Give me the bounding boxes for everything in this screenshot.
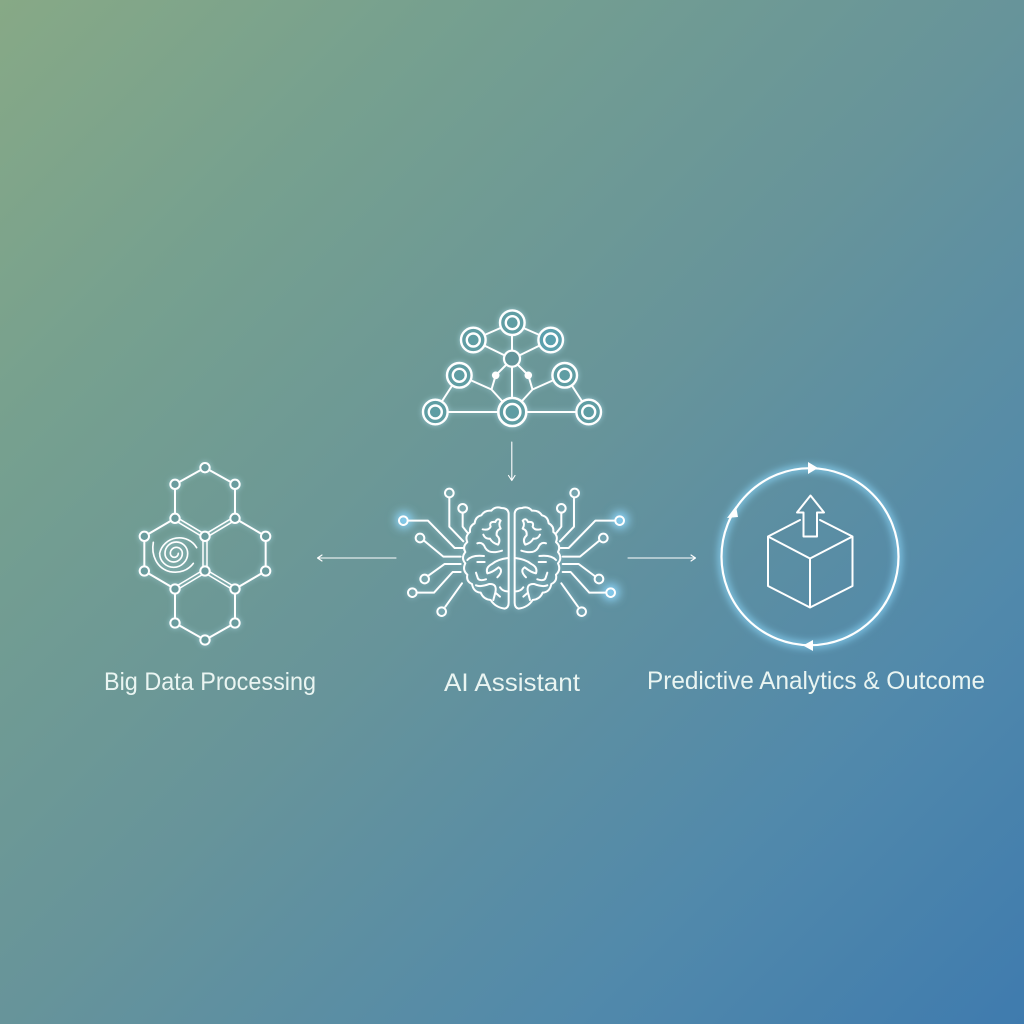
label: AI assistant: AI Assistant [444, 669, 580, 697]
network nodes [423, 310, 601, 426]
arrow: brain to predictive analytics [628, 555, 696, 561]
up arrow [797, 496, 824, 536]
left hemisphere [463, 507, 509, 609]
spiral [160, 538, 197, 567]
icon: hexagon data cluster with spiral [140, 463, 270, 645]
icon: neural network hierarchy [423, 310, 601, 426]
icon: cycle ring with box and up arrow [722, 462, 898, 651]
glow spots [397, 513, 627, 599]
right hemisphere [515, 507, 560, 609]
icon: AI brain with circuits [397, 489, 627, 616]
label: predictive analytics and outcome: Predictive Analytics & Outcome [647, 667, 985, 695]
hexagon nodes [140, 463, 270, 645]
left circuits [408, 497, 468, 607]
ring arrowheads [727, 462, 818, 651]
open box [768, 496, 852, 608]
terminal nodes [399, 489, 624, 616]
label: big data processing: Big Data Processing [104, 668, 316, 696]
arrow: brain to big data [318, 555, 396, 561]
right circuits [556, 497, 615, 607]
arrow: network to brain [508, 442, 515, 480]
